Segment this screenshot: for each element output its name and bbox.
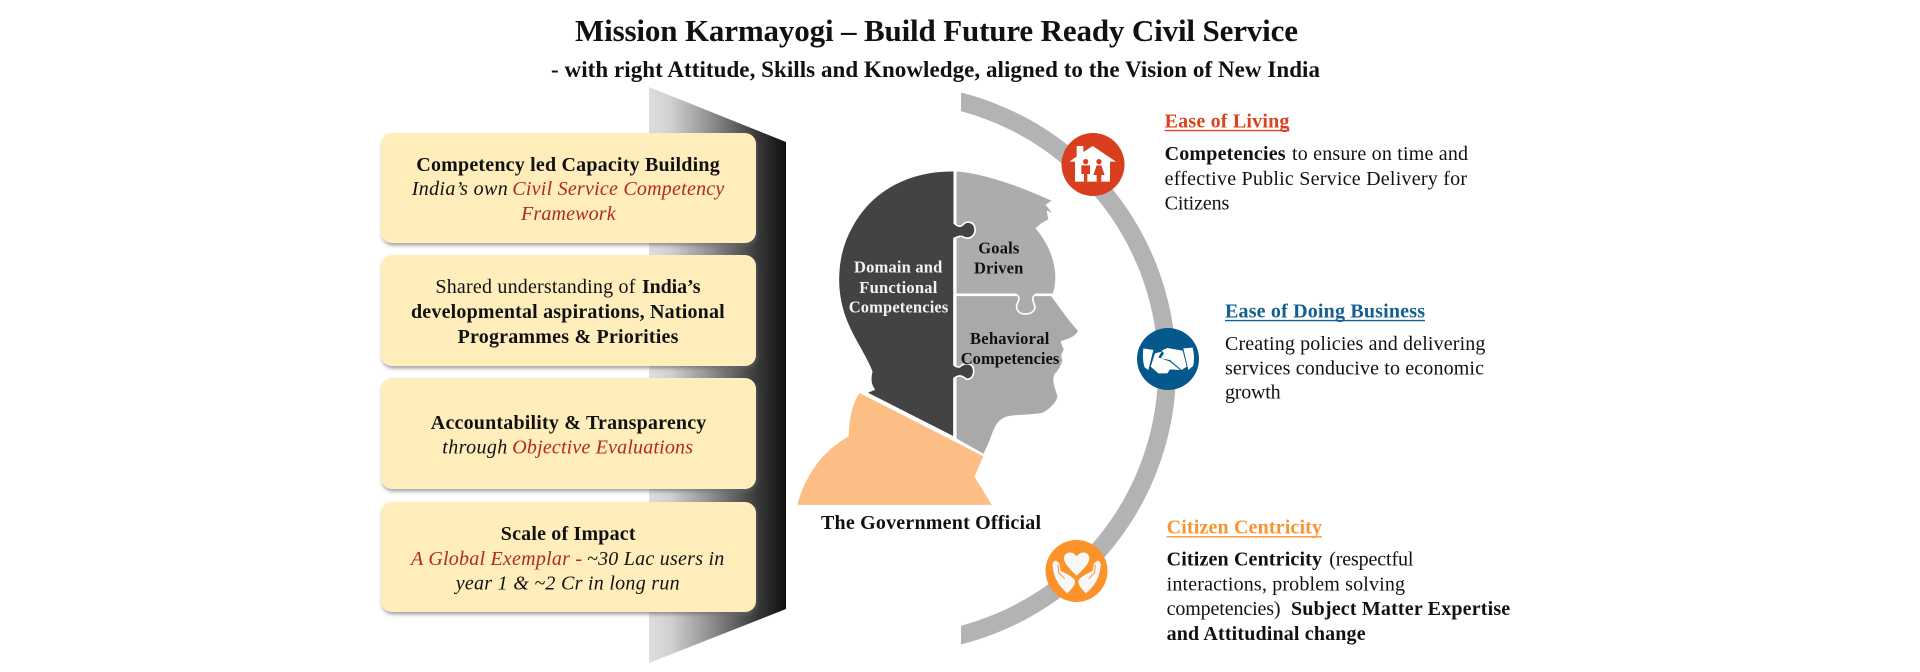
heading: citizen centricity: Citizen Centricity <box>1167 516 1322 538</box>
caption: the government official: The Government Official <box>821 512 1041 534</box>
title: Mission Karmayogi – Build Future Ready Civil Service <box>575 13 1298 48</box>
heading: competency led capacity building: Competency led Capacity Building <box>416 154 720 176</box>
text: shared understanding of: Shared understanding of <box>435 276 636 298</box>
label: goals driven: Goals <box>978 238 1020 257</box>
icon: citizen centricity hands and heart <box>1046 540 1108 602</box>
arc ring <box>961 92 1176 644</box>
heading: ease of living: Ease of Living <box>1165 110 1289 132</box>
panel: accountability and transparency <box>381 378 756 489</box>
text: competencies: competencies) <box>1167 598 1281 620</box>
text: competencies: Competencies <box>1165 143 1286 165</box>
heading: accountability and transparency: Accountability & Transparency <box>431 412 706 434</box>
text: citizens: Citizens <box>1165 192 1230 214</box>
text: respectful: (respectful <box>1329 549 1414 571</box>
label: domain and functional competencies: Domain and <box>854 258 942 277</box>
arrow backdrop: gradient funnel behind boxes <box>649 87 786 663</box>
text: India's own: India’s own <box>411 178 508 200</box>
text: creating policies: Creating policies and delivering <box>1225 333 1485 355</box>
head graphic: puzzle pieces and shoulders <box>797 171 1079 505</box>
puzzle piece: domain and functional competencies <box>838 171 975 437</box>
shoulders <box>797 392 993 505</box>
chart: head diagram <box>797 171 1079 534</box>
puzzle piece: goals driven <box>956 171 1056 314</box>
puzzle piece: behavioral competencies <box>956 295 1079 455</box>
label: domain and functional competencies <box>849 258 949 317</box>
text: framework: Framework <box>520 203 617 225</box>
panel: competency led capacity building <box>381 133 756 243</box>
text: subject matter expertise: Subject Matter Expertise <box>1291 598 1510 620</box>
text: India's: India’s <box>642 276 701 298</box>
text: growth: growth <box>1225 382 1281 404</box>
text: developmental aspirations: developmental aspirations, National <box>411 301 725 323</box>
text: citizen centricity bold: Citizen Centricity <box>1167 549 1322 571</box>
icon: ease of doing business handshake <box>1137 328 1199 390</box>
text: long run users: year 1 & ~2 Cr in long run <box>454 572 680 594</box>
panel: scale of impact <box>381 502 756 612</box>
heading: ease of doing business: Ease of Doing Business <box>1225 300 1425 322</box>
text: to ensure: to ensure on time and <box>1292 143 1468 165</box>
text: attitudinal change: and Attitudinal change <box>1167 623 1366 645</box>
label: behavioral competencies: Behavioral <box>970 329 1050 348</box>
heading: scale of impact: Scale of Impact <box>501 523 636 545</box>
panel: shared understanding <box>381 255 756 366</box>
text: users in year one: ~30 Lac users in <box>587 548 724 570</box>
text: civil service competency: Civil Service Competency <box>512 178 724 200</box>
text: objective evaluations: Objective Evaluations <box>512 436 693 458</box>
label: goals driven <box>974 238 1023 277</box>
label: domain and functional competencies: Functional <box>859 278 938 297</box>
text: services conducive: services conducive to economic <box>1225 357 1484 379</box>
label: behavioral competencies: Competencies <box>961 349 1060 368</box>
panel: ease of living <box>1165 110 1468 214</box>
label: behavioral competencies <box>961 329 1060 368</box>
text: through: through <box>442 436 507 458</box>
icon: ease of living house <box>1062 133 1124 196</box>
text: programmes and priorities: Programmes & Priorities <box>458 326 679 348</box>
label: goals driven: Driven <box>974 258 1023 277</box>
subtitle: - with right Attitude, Skills and Knowledge, aligned to the Vision of New India <box>551 57 1320 82</box>
label: domain and functional competencies: Competencies <box>849 298 949 317</box>
text: effective delivery: effective Public Service Delivery for <box>1165 168 1467 190</box>
text: a global exemplar: A Global Exemplar - <box>409 548 582 570</box>
panel: citizen centricity <box>1167 516 1510 645</box>
panel: ease of doing business <box>1225 300 1485 404</box>
text: interactions: interactions, problem solving <box>1167 574 1405 596</box>
